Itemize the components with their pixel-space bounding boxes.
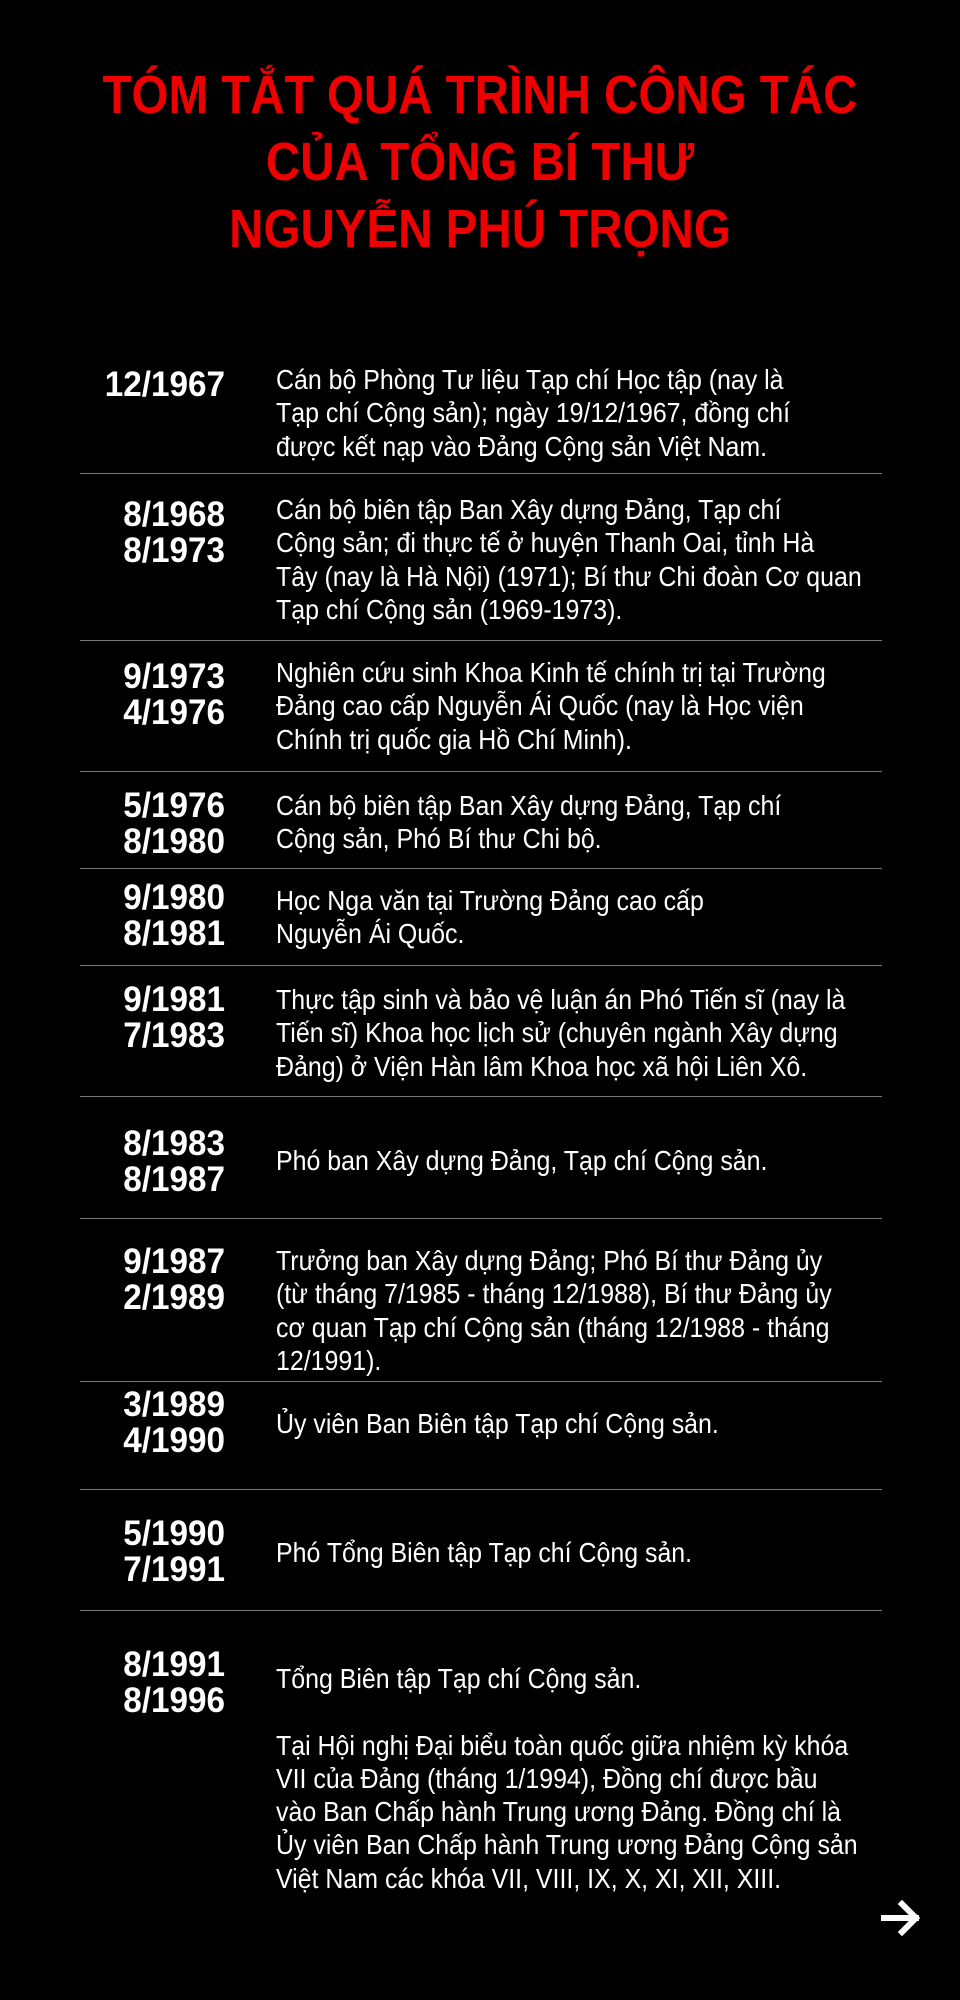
row 6 date: 7/1983 (123, 1016, 225, 1055)
row 3 text: Chính trị quốc gia Hồ Chí Minh). (276, 724, 632, 755)
row 4 date: 5/1976 (123, 786, 225, 825)
row 7 date (123, 1124, 225, 1199)
title: CỦA TỔNG BÍ THƯ (266, 132, 694, 192)
row 5 text (276, 885, 704, 949)
row 7 text: Phó ban Xây dựng Đảng, Tạp chí Cộng sản. (276, 1145, 767, 1176)
row 6 text: Thực tập sinh và bảo vệ luận án Phó Tiến sĩ (nay là (276, 984, 845, 1015)
row 4 text: Cán bộ biên tập Ban Xây dựng Đảng, Tạp chí (276, 790, 781, 821)
title (103, 64, 857, 259)
row 3 date (123, 657, 225, 732)
row 2 date (123, 495, 225, 570)
row 6 text (276, 984, 846, 1082)
row 5 text: Học Nga văn tại Trường Đảng cao cấp (276, 885, 704, 916)
row 4 text: Cộng sản, Phó Bí thư Chi bộ. (276, 823, 602, 854)
row 10 date: 7/1991 (123, 1550, 225, 1589)
row 8 date: 9/1987 (123, 1242, 225, 1281)
row 1 text (276, 364, 790, 462)
row 5 date: 8/1981 (123, 914, 225, 953)
row 4 date: 8/1980 (123, 822, 225, 861)
row 6 date (123, 980, 225, 1055)
title: NGUYỄN PHÚ TRỌNG (229, 199, 731, 259)
row 3 text: Đảng cao cấp Nguyễn Ái Quốc (nay là Học viện (276, 690, 804, 721)
row 4 date (123, 786, 225, 861)
row 9 date: 3/1989 (123, 1385, 225, 1424)
row 8 text: (từ tháng 7/1985 - tháng 12/1988), Bí thư Đảng ủy (276, 1278, 832, 1309)
row 2 text: Cộng sản; đi thực tế ở huyện Thanh Oai, tỉnh Hà (276, 527, 814, 558)
row 11 date: 8/1996 (123, 1681, 225, 1720)
row 1 text: được kết nạp vào Đảng Cộng sản Việt Nam. (276, 431, 767, 462)
row 6 date: 9/1981 (123, 980, 225, 1019)
row 11 date: 8/1991 (123, 1645, 225, 1684)
row 11 text (276, 1663, 858, 1894)
row 11 text: Việt Nam các khóa VII, VIII, IX, X, XI, XII, XIII. (276, 1863, 781, 1894)
row 1 text: Tạp chí Cộng sản); ngày 19/12/1967, đồng chí (276, 397, 790, 428)
row 8 date: 2/1989 (123, 1278, 225, 1317)
row 8 date (123, 1242, 225, 1317)
row 6 text: Tiến sĩ) Khoa học lịch sử (chuyên ngành Xây dựng (276, 1017, 838, 1048)
row 11 text: Ủy viên Ban Chấp hành Trung ương Đảng Cộng sản (276, 1829, 858, 1860)
row 2 text: Tây (nay là Hà Nội) (1971); Bí thư Chi đoàn Cơ quan (276, 561, 862, 592)
row 6 text: Đảng) ở Viện Hàn lâm Khoa học xã hội Liên Xô. (276, 1051, 807, 1082)
row 11 text: Tại Hội nghị Đại biểu toàn quốc giữa nhiệm kỳ khóa (276, 1730, 848, 1761)
row 8 text: 12/1991). (276, 1345, 381, 1376)
title: TÓM TẮT QUÁ TRÌNH CÔNG TÁC (103, 65, 857, 125)
row 1 text: Cán bộ Phòng Tư liệu Tạp chí Học tập (nay là (276, 364, 784, 395)
row 10 text: Phó Tổng Biên tập Tạp chí Cộng sản. (276, 1537, 692, 1568)
row 2 date: 8/1968 (123, 495, 225, 534)
row 9 text: Ủy viên Ban Biên tập Tạp chí Cộng sản. (276, 1408, 719, 1439)
row 3 date: 9/1973 (123, 657, 225, 696)
row 2 text: Cán bộ biên tập Ban Xây dựng Đảng, Tạp chí (276, 494, 781, 525)
row 11 text: Tổng Biên tập Tạp chí Cộng sản. (276, 1663, 641, 1694)
row 9 date: 4/1990 (123, 1421, 225, 1460)
row 5 date (123, 878, 225, 953)
row 10 date (123, 1514, 225, 1589)
row 3 text (276, 657, 826, 755)
row 1 date: 12/1967 (105, 365, 225, 404)
row 3 date: 4/1976 (123, 693, 225, 732)
row 8 text (276, 1245, 832, 1376)
row 3 text: Nghiên cứu sinh Khoa Kinh tế chính trị tại Trường (276, 657, 826, 688)
row 11 date (123, 1645, 225, 1720)
row 4 text (276, 790, 782, 854)
row 2 date: 8/1973 (123, 531, 225, 570)
row 2 text (276, 494, 862, 625)
row 2 text: Tạp chí Cộng sản (1969-1973). (276, 594, 622, 625)
row 10 date: 5/1990 (123, 1514, 225, 1553)
row 11 text: vào Ban Chấp hành Trung ương Đảng. Đồng chí là (276, 1796, 841, 1827)
row 7 date: 8/1983 (123, 1124, 225, 1163)
row 5 date: 9/1980 (123, 878, 225, 917)
row 11 text: VII của Đảng (tháng 1/1994), Đồng chí được bầu (276, 1763, 817, 1794)
icon: next arrow (881, 1900, 920, 1936)
row 7 date: 8/1987 (123, 1160, 225, 1199)
row 9 date (123, 1385, 225, 1460)
row 5 text: Nguyễn Ái Quốc. (276, 918, 464, 949)
row 8 text: Trưởng ban Xây dựng Đảng; Phó Bí thư Đảng ủy (276, 1245, 822, 1276)
row 8 text: cơ quan Tạp chí Cộng sản (tháng 12/1988 - tháng (276, 1312, 829, 1343)
